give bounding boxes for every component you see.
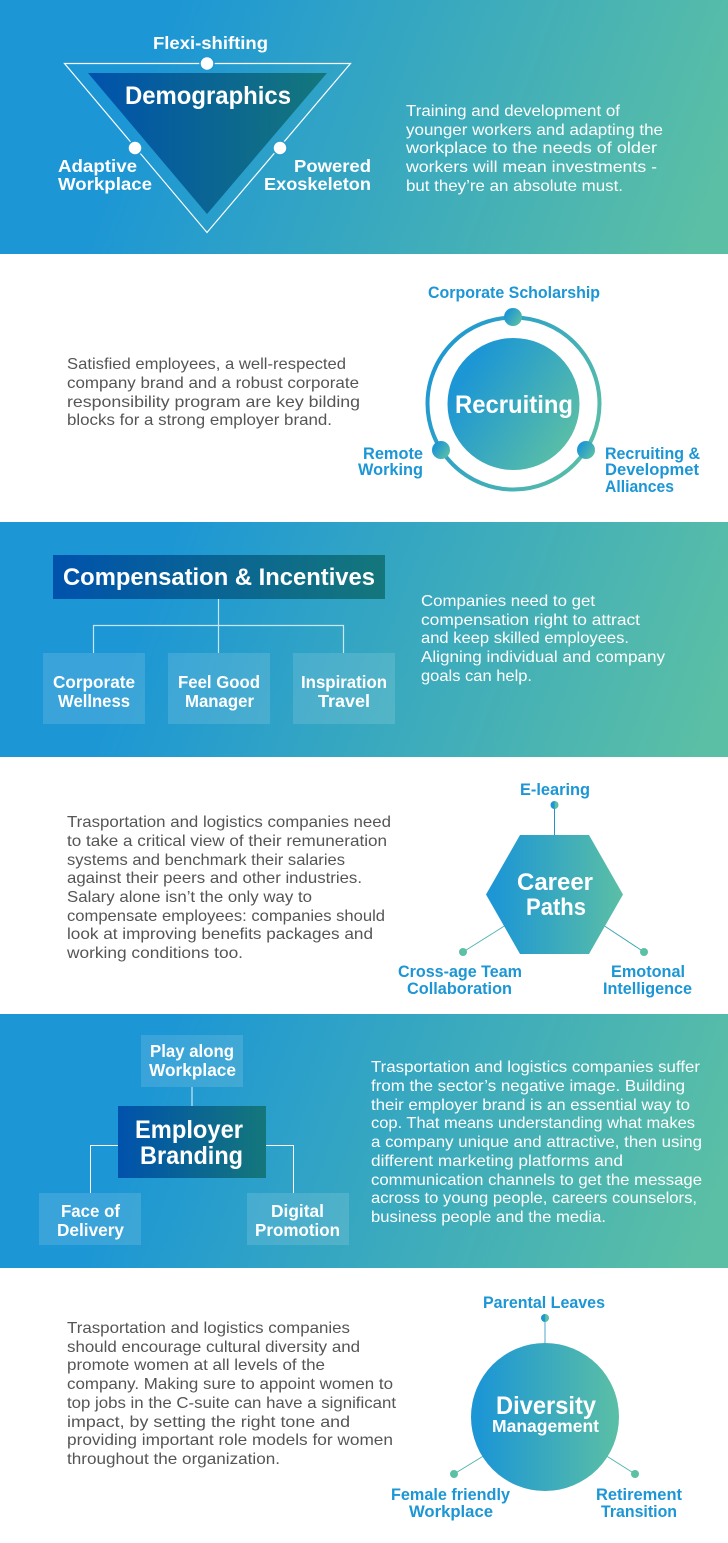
label: female friendly workplace [391, 1486, 511, 1521]
text: employer branding description: different marketing platforms and [371, 1153, 623, 1170]
circle: diversity management: Diversity [496, 1392, 596, 1420]
heading: demographics: Demographics [125, 82, 291, 110]
text: career paths description: against their peers and other industries. [67, 870, 362, 887]
text: compensation description: compensation right to attract [421, 612, 641, 629]
connector lines [90, 1087, 294, 1193]
box: corporate wellness: Corporate [53, 672, 135, 692]
node: e-learning [550, 801, 558, 809]
node: corporate scholarship [504, 308, 522, 326]
text: demographics description: Training and development of [406, 103, 621, 120]
node: recruiting alliances [577, 441, 595, 459]
label: remote working: Remote [363, 445, 423, 463]
box: play along workplace [141, 1035, 243, 1087]
label: powered exoskeleton [264, 156, 371, 194]
text: employer branding description: cop. That means understanding what makes [371, 1115, 695, 1132]
text: employer branding description: business people and the media. [371, 1209, 606, 1226]
text: career paths description: to take a critical view of their remuneration [67, 833, 387, 850]
text: recruiting description: company brand and a robust corporate [67, 375, 359, 392]
node: parental leaves [541, 1314, 549, 1322]
box: digital promotion: Promotion [255, 1220, 340, 1240]
text: diversity description: should encourage cultural diversity and [67, 1339, 360, 1356]
label: adaptive workplace: Adaptive [58, 156, 137, 176]
box: play along workplace: Workplace [149, 1060, 236, 1080]
circle: recruiting [448, 338, 580, 470]
text: compensation description [421, 593, 665, 685]
text: career paths description: Trasportation and logistics companies need [67, 814, 391, 831]
box: feel good manager [168, 653, 270, 724]
label: cross-age team collaboration: Collaboration [407, 980, 512, 998]
box: face of delivery [39, 1193, 141, 1245]
label: emotional intelligence [603, 963, 692, 998]
label: recruiting and development alliances [605, 445, 700, 496]
panel: career paths [0, 757, 728, 1014]
text: compensation description: Companies need to get [421, 593, 596, 610]
label: powered exoskeleton: Powered [294, 156, 371, 176]
text: demographics description: workplace to the needs of older [405, 140, 658, 157]
box: digital promotion: Digital [271, 1201, 324, 1221]
label: parental leaves: Parental Leaves [483, 1294, 605, 1312]
text: diversity description: company. Making sure to appoint women to [67, 1376, 393, 1393]
label: female friendly workplace: Female friendly [391, 1486, 511, 1504]
label: recruiting and development alliances: Developmet [605, 461, 700, 479]
text: career paths description: look at improving benefits packages and [67, 926, 373, 943]
text: compensation description: Aligning individual and company [421, 649, 665, 666]
hexagon: career paths: Career [517, 869, 593, 896]
text: employer branding description: communication channels to get the message [371, 1172, 702, 1189]
panel: diversity management [0, 1268, 728, 1543]
label: remote working [358, 445, 423, 479]
node: adaptive workplace [128, 141, 142, 155]
text: career paths description: systems and benchmark their salaries [67, 852, 345, 869]
circle: diversity management [471, 1343, 619, 1491]
label: flexi-shifting: Flexi-shifting [153, 33, 268, 53]
text: career paths description: Salary alone isn’t the only way to [67, 889, 312, 906]
node: flexi-shifting [200, 56, 214, 70]
box: compensation and incentives: Compensation & Incentives [63, 564, 375, 591]
label: e-learning: E-learing [520, 781, 590, 799]
connector lines [454, 1318, 635, 1474]
text: employer branding description [371, 1059, 702, 1226]
text: employer branding description: Trasportation and logistics companies suffer [371, 1059, 701, 1076]
text: diversity description: impact, by setting the right tone and [67, 1414, 350, 1431]
text: diversity description: Trasportation and logistics companies [67, 1320, 350, 1337]
label: retirement transition: Transition [601, 1503, 677, 1521]
box: face of delivery: Delivery [57, 1220, 124, 1240]
text: employer branding description: a company unique and attractive, then using [371, 1134, 702, 1151]
ring [428, 318, 600, 490]
text: employer branding description: from the sector’s negative image. Building [371, 1078, 685, 1095]
triangle: demographics [88, 73, 327, 214]
text: career paths description: working conditions too. [66, 945, 243, 962]
connector lines [94, 599, 344, 653]
panel: compensation and incentives [0, 522, 728, 757]
label: remote working: Working [358, 461, 423, 479]
text: career paths description [66, 814, 391, 962]
text: diversity description [67, 1320, 397, 1468]
box: play along workplace: Play along [150, 1041, 234, 1061]
text: employer branding description: their employer brand is an essential way to [371, 1097, 690, 1114]
panel: recruiting [0, 254, 728, 522]
panel: employer branding [0, 1014, 728, 1268]
label: cross-age team collaboration: Cross-age Team [398, 963, 522, 981]
box: compensation and incentives [53, 555, 385, 599]
triangle outline [64, 64, 350, 232]
label: female friendly workplace: Workplace [409, 1503, 493, 1521]
box: feel good manager: Feel Good [178, 672, 260, 692]
connector lines [463, 805, 644, 952]
text: diversity description: providing important role models for women [67, 1432, 393, 1449]
box: inspiration travel: Travel [318, 691, 370, 711]
node: powered exoskeleton [273, 141, 287, 155]
node: cross-age team collaboration [459, 948, 467, 956]
box: inspiration travel: Inspiration [301, 672, 387, 692]
label: retirement transition: Retirement [596, 1486, 682, 1504]
label: emotional intelligence: Emotonal [611, 963, 685, 981]
hexagon: career paths: Paths [526, 894, 586, 921]
box: corporate wellness [43, 653, 145, 724]
text: recruiting description: responsibility program are key bilding [67, 394, 360, 411]
box: employer branding [118, 1106, 266, 1178]
label: cross-age team collaboration [398, 963, 522, 998]
text: recruiting description [67, 356, 360, 429]
node: retirement transition [631, 1470, 639, 1478]
hexagon: career paths [486, 835, 623, 954]
label: recruiting and development alliances: Alliances [605, 478, 674, 496]
text: compensation description: and keep skilled employees. [421, 630, 629, 647]
heading: recruiting: Recruiting [455, 391, 573, 419]
text: demographics description: younger workers and adapting the [406, 122, 663, 139]
box: inspiration travel [293, 653, 395, 724]
box: digital promotion [247, 1193, 349, 1245]
node: remote working [432, 441, 450, 459]
text: compensation description: goals can help. [421, 668, 532, 685]
label: corporate scholarship: Corporate Scholarship [428, 284, 600, 302]
box: employer branding: Branding [140, 1142, 243, 1170]
text: employer branding description: across to young people, careers counselors, [371, 1190, 697, 1207]
text: diversity description: throughout the organization. [67, 1451, 280, 1468]
box: face of delivery: Face of [61, 1201, 120, 1221]
label: adaptive workplace [58, 156, 152, 194]
text: recruiting description: Satisfied employees, a well-respected [67, 356, 346, 373]
box: feel good manager: Manager [185, 691, 254, 711]
text: career paths description: compensate employees: companies should [67, 908, 385, 925]
label: recruiting and development alliances: Recruiting & [605, 445, 700, 463]
box: corporate wellness: Wellness [58, 691, 130, 711]
label: retirement transition [596, 1486, 682, 1521]
panel: demographics [0, 0, 728, 254]
node: emotional intelligence [640, 948, 648, 956]
circle: diversity management: Management [492, 1416, 599, 1436]
box: employer branding: Employer [135, 1116, 243, 1144]
node: female friendly workplace [450, 1470, 458, 1478]
text: demographics description [405, 103, 663, 195]
label: adaptive workplace: Workplace [58, 174, 152, 194]
text: demographics description: but they’re an absolute must. [406, 178, 623, 195]
text: demographics description: workers will mean investments - [405, 159, 657, 176]
text: recruiting description: blocks for a strong employer brand. [67, 412, 332, 429]
text: diversity description: promote women at all levels of the [67, 1357, 325, 1374]
text: diversity description: top jobs in the C-suite can have a significant [67, 1395, 397, 1412]
label: emotional intelligence: Intelligence [603, 980, 692, 998]
label: powered exoskeleton: Exoskeleton [264, 174, 371, 194]
